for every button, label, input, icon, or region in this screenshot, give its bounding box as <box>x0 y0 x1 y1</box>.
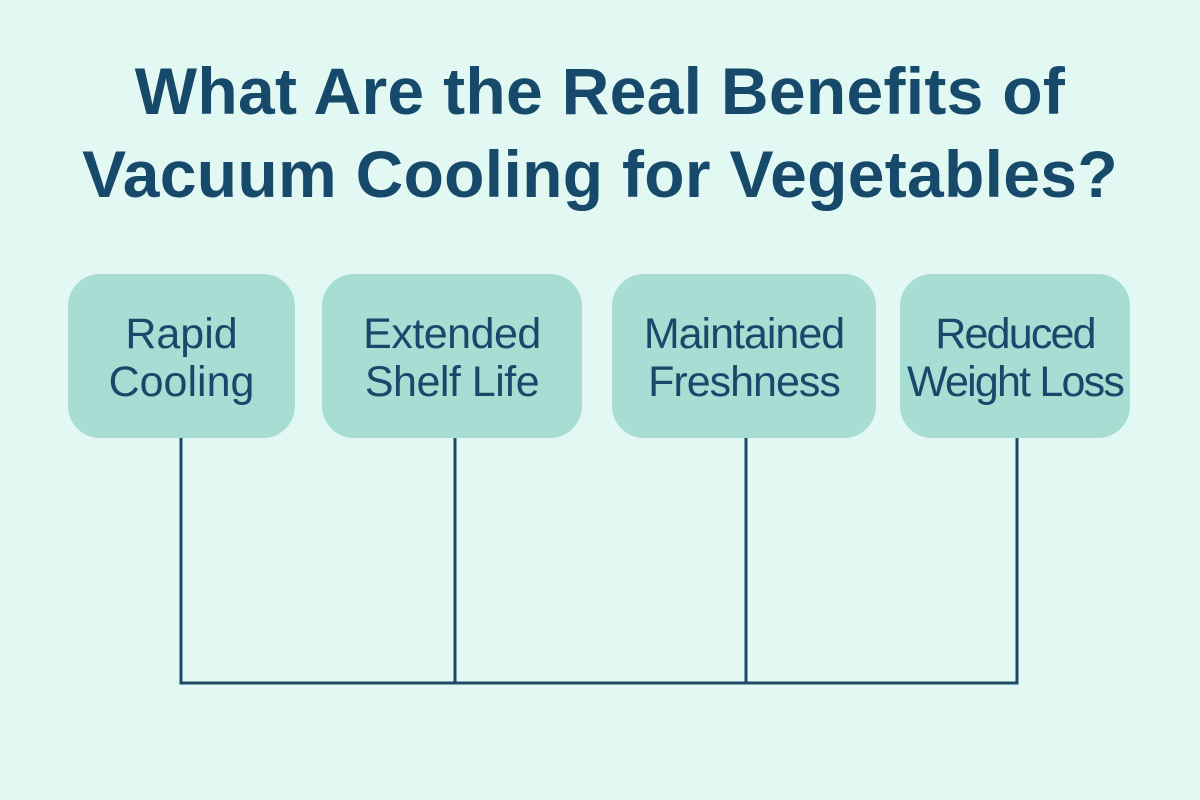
box: reduced weight loss <box>900 274 1130 438</box>
box: maintained freshness <box>612 274 876 438</box>
box: reduced weight loss: Weight Loss <box>907 358 1123 406</box>
box: extended shelf life: Shelf Life <box>365 358 539 406</box>
box: rapid cooling: Cooling <box>109 358 254 406</box>
title: What Are the Real Benefits of <box>135 54 1065 128</box>
box: rapid cooling <box>68 274 295 438</box>
title: Vacuum Cooling for Vegetables? <box>82 137 1118 211</box>
box: maintained freshness: Freshness <box>648 358 840 406</box>
box: extended shelf life <box>322 274 582 438</box>
box: reduced weight loss: Reduced <box>935 310 1095 358</box>
box: maintained freshness: Maintained <box>644 310 844 358</box>
title <box>82 54 1118 211</box>
box: extended shelf life: Extended <box>363 310 541 358</box>
box: rapid cooling: Rapid <box>125 310 238 358</box>
